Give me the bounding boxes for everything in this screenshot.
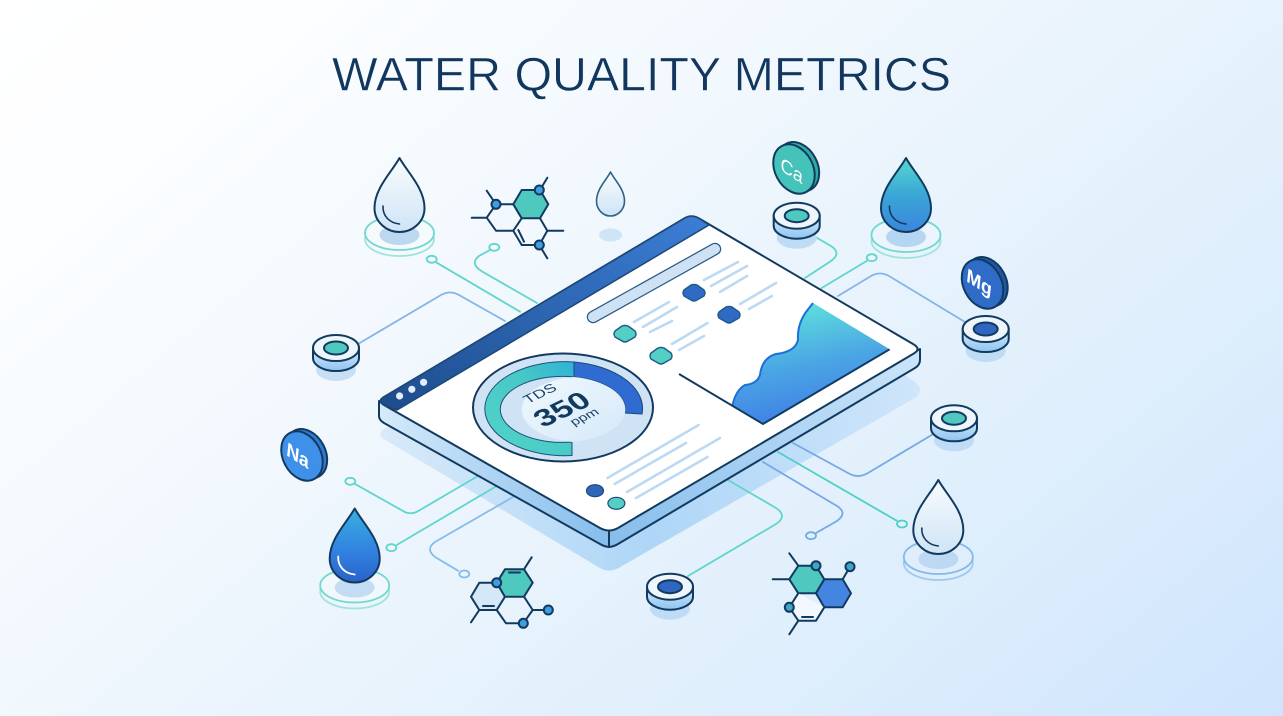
connector lines [345, 235, 965, 578]
disc: lower right [931, 405, 977, 451]
connector: teal top right disc [805, 235, 836, 278]
list markers [614, 284, 740, 364]
gauge centre [522, 377, 625, 442]
coin: magnesium [954, 250, 1016, 316]
search bar [593, 249, 715, 317]
gauge teal arc [485, 362, 574, 456]
coin: calcium: Ca [779, 154, 805, 189]
gauge blue arc [574, 362, 643, 414]
window control dots [396, 379, 427, 400]
drop: small centre [596, 172, 624, 242]
drop: teal top right [872, 158, 940, 258]
text lines upper [634, 262, 776, 350]
connector: blue right [838, 274, 965, 322]
dashboard panel [379, 216, 920, 547]
disc: bottom [647, 574, 693, 620]
window title bar [380, 216, 709, 410]
TDS gauge [473, 354, 653, 462]
chart area [732, 303, 890, 424]
disc: left [313, 335, 359, 381]
gauge face [473, 354, 653, 462]
molecule: top [472, 178, 563, 258]
coin: calcium [765, 135, 827, 201]
chart axes [679, 349, 890, 424]
connector: blue lower right disc [793, 435, 932, 476]
gauge label TDS: TDS [520, 381, 560, 407]
connector: teal top centre [475, 244, 537, 303]
drop: white lower right [904, 480, 973, 580]
panel left side [379, 401, 609, 547]
title: WATER QUALITY METRICS [332, 48, 951, 100]
drop: white top left [365, 158, 434, 256]
gauge value 350: 350 [527, 387, 597, 433]
coin: magnesium: Mg [965, 265, 993, 302]
panel surface [380, 216, 918, 530]
molecule: bottom right [773, 553, 854, 634]
chart line [732, 303, 813, 405]
molecule: bottom left [471, 557, 553, 628]
coin: sodium: Na [285, 439, 311, 474]
drop: blue lower left [320, 508, 389, 608]
connector: blue lower centre [763, 462, 842, 539]
connector: blue lower left [430, 497, 513, 578]
connector: teal lower left [345, 476, 478, 513]
area chart [679, 303, 890, 424]
disc: right [963, 316, 1009, 362]
status dots [586, 485, 625, 509]
gauge unit ppm: ppm [567, 406, 602, 428]
connector: teal lower right [778, 452, 907, 528]
connector: blue left [358, 292, 505, 344]
connector: teal top left [427, 256, 520, 312]
panel shadow [380, 372, 920, 571]
coin: sodium [273, 422, 335, 488]
text lines lower [608, 425, 720, 498]
connector: teal lower left long [386, 486, 497, 551]
panel right side [609, 349, 920, 547]
connector: teal bottom disc [688, 480, 782, 576]
connector: teal top right [822, 254, 877, 288]
disc: top right [774, 203, 820, 249]
